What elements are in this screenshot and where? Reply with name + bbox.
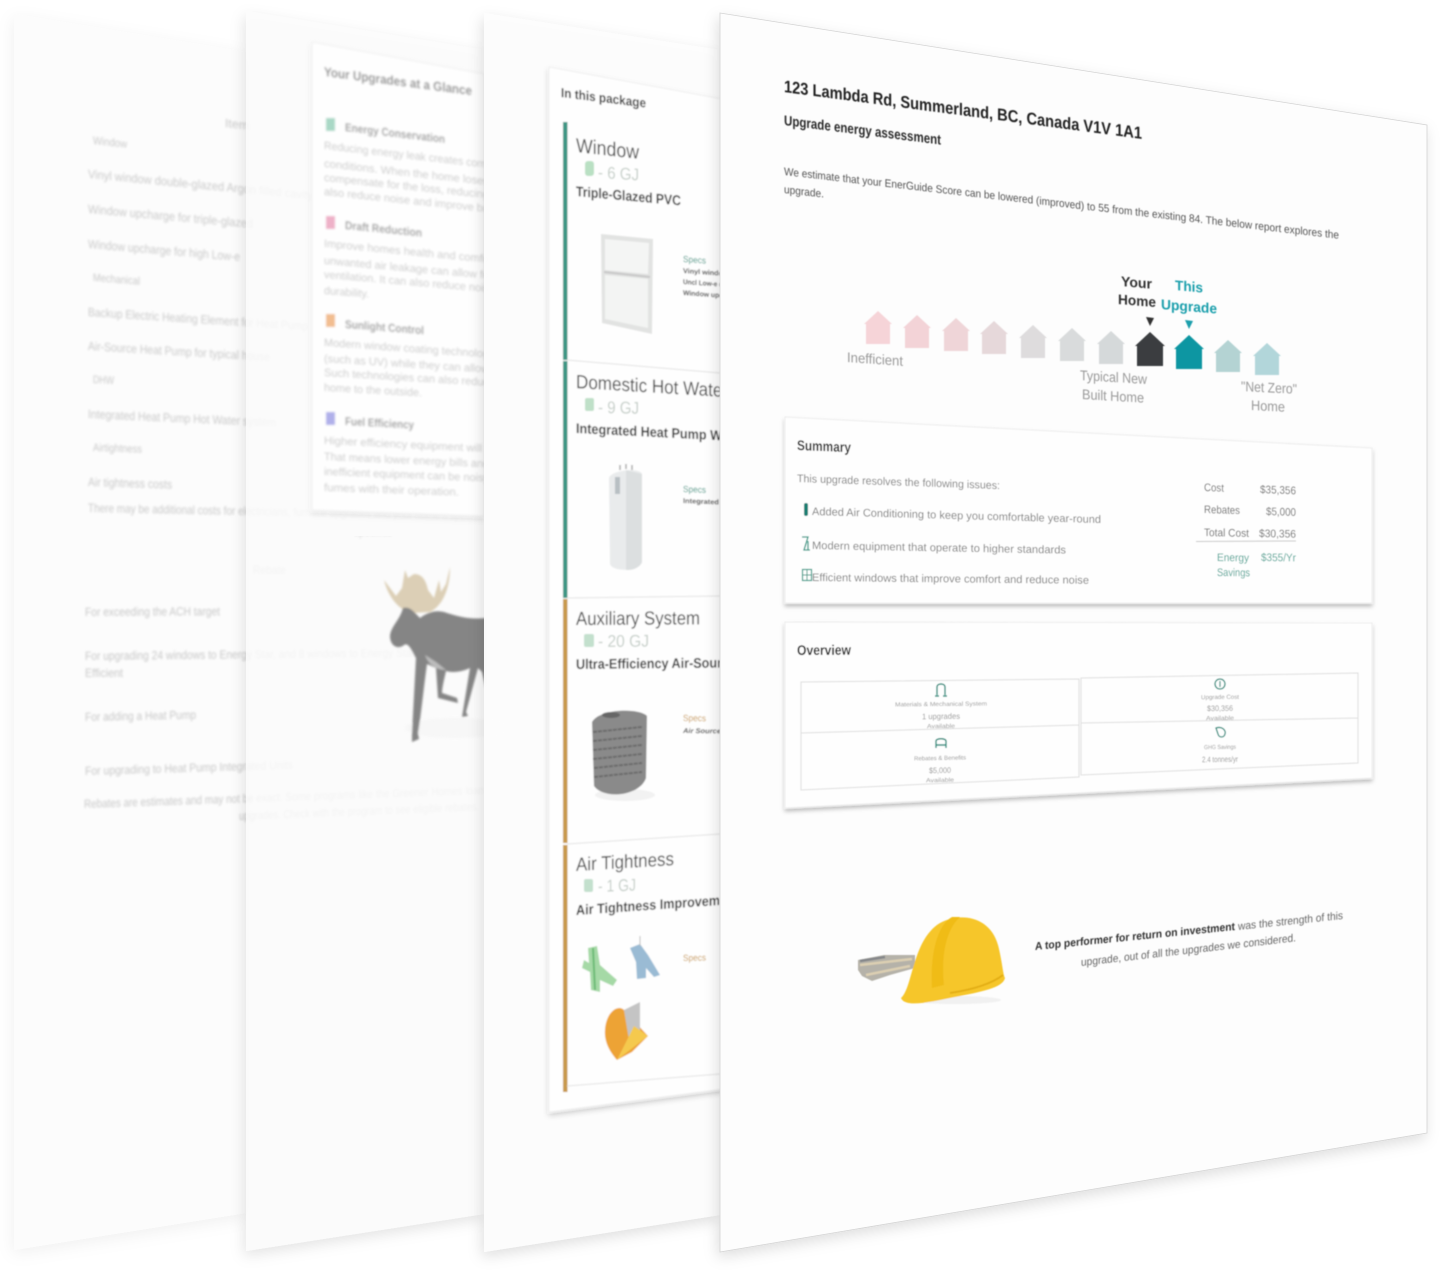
panel: page 2, in this package — [478, 18, 720, 1260]
cell: upgrade cost: Upgrade Cost — [1201, 695, 1239, 701]
item: energy conservation: also reduce noise and improve bu — [324, 186, 489, 215]
colour bars — [563, 122, 720, 1092]
specifics caption: specifics — [354, 525, 392, 539]
item: fuel efficiency: Fuel Efficiency — [345, 416, 415, 432]
cell: upgrade cost: Available — [1206, 716, 1235, 722]
icon: moose — [384, 567, 505, 742]
subtitle: Upgrade energy assessment — [784, 112, 941, 148]
intro text: We estimate that your EnerGuide Score can be lowered (improved) to 55 from the existing 84. The below report explores the — [784, 166, 1339, 242]
item: sunlight control: (such as UV) while they can allow — [324, 353, 489, 376]
cost table: Cost — [1204, 482, 1224, 495]
icon: window product — [601, 234, 653, 334]
cell: rebates and benefits — [914, 739, 966, 784]
cost table: $355/Yr — [1261, 552, 1296, 564]
item: draft reduction: Improve homes health and comfo — [324, 238, 489, 266]
marker: your home: Your — [1121, 273, 1153, 292]
item: auxiliary system: Auxiliary System — [576, 608, 700, 630]
item: sunlight control: Such technologies can also reduc — [324, 367, 489, 389]
icon: blue sealant tube — [630, 936, 660, 979]
cost table text: There may be additional costs for electricians, furnace upgrades and your home's specific — [88, 501, 483, 523]
cell: ghg savings: 2.4 tonnes/yr — [1202, 755, 1238, 764]
item: domestic hot water: Integrated l — [683, 498, 723, 507]
heading: Your Upgrades at a Glance — [324, 64, 472, 98]
item: air tightness: - 1 GJ — [598, 875, 636, 896]
item: draft reduction: ventilation. It can also reduce nois — [324, 269, 489, 295]
icon: keys — [858, 955, 915, 981]
marker: this upgrade: Upgrade — [1161, 296, 1217, 316]
rebate table text: upgrades. Check with the program to see eligible rebates. — [239, 799, 479, 823]
cell: materials and mechanical system: Materials & Mechanical System — [895, 702, 987, 708]
item: domestic hot water: Integrated Heat Pump W — [576, 420, 723, 443]
intro text: upgrade. — [784, 184, 824, 201]
rebate table text: For upgrading 24 windows to Energy Star, and 8 windows to Energy Star Most — [85, 645, 441, 663]
marker: your home — [1118, 273, 1156, 326]
cost table text: Backup Electric Heating Element for Heat Pump — [88, 305, 308, 333]
item: window: Vinyl windo — [683, 268, 723, 278]
rebate table text: For exceeding the ACH target — [85, 604, 221, 619]
item: air tightness: Air Tightness — [576, 849, 674, 876]
house scale icons — [864, 311, 1281, 375]
item: fuel efficiency — [324, 412, 489, 499]
rebate table text — [84, 563, 484, 823]
item: window: Window — [576, 135, 639, 164]
item: energy conservation: Energy Conservation — [345, 122, 445, 146]
item: energy conservation: Reducing energy leak creates comf — [324, 140, 490, 171]
marker: this upgrade — [1161, 277, 1217, 329]
rebate table text: For upgrading to Heat Pump Integrated Units — [85, 758, 293, 778]
issues list: Efficient windows that improve comfort and reduce noise — [812, 572, 1089, 587]
scale labels: "Net Zero" — [1241, 378, 1297, 397]
rebate table text: For adding a Heat Pump — [85, 708, 196, 724]
item: auxiliary system: Air Source — [682, 728, 721, 735]
item: fuel efficiency: fumes with their operation. — [324, 482, 459, 499]
item: domestic hot water: Domestic Hot Water — [576, 372, 729, 402]
callout: top performer: was the strength of this — [1237, 910, 1343, 933]
icon: green sealant tube — [582, 946, 617, 992]
scale labels: Home — [1251, 397, 1285, 415]
item: fuel efficiency: inefficient equipment can be noisy — [324, 466, 489, 485]
icon: heat pump unit — [592, 711, 655, 801]
scale labels — [847, 349, 1297, 415]
rebate table text: Efficient — [85, 666, 124, 680]
item: sunlight control: Sunlight Control — [345, 319, 424, 337]
cell: rebates and benefits: Available — [926, 778, 955, 784]
scale labels: Built Home — [1082, 386, 1144, 406]
cost table — [1196, 482, 1296, 579]
panel: page 1, upgrade energy assessment — [720, 13, 1427, 1252]
cell: materials and mechanical system: 1 upgrades — [922, 712, 960, 721]
cell: ghg savings — [1202, 727, 1238, 764]
callout: top performer: A top performer for return on investment — [1035, 921, 1235, 953]
cost table text: Item — [225, 116, 249, 133]
overview heading: Overview — [797, 642, 851, 658]
scale labels: Inefficient — [847, 349, 903, 369]
cell: upgrade cost — [1201, 679, 1239, 722]
item: air tightness — [576, 849, 720, 1060]
cell: rebates and benefits: Rebates & Benefits — [914, 755, 966, 763]
item: air tightness: Air Tightness Improvem — [576, 892, 720, 918]
item: domestic hot water: - 9 GJ — [598, 398, 639, 418]
cell: rebates and benefits: $5,000 — [929, 766, 951, 775]
item: draft reduction: Draft Reduction — [345, 220, 422, 240]
card: summary — [785, 417, 1372, 603]
item: sunlight control: Modern window coating technolog — [324, 337, 489, 361]
icon: insulation roll — [605, 1002, 648, 1060]
marker: this upgrade: This — [1175, 277, 1203, 296]
callout: top performer — [1035, 910, 1343, 969]
item: energy conservation — [324, 118, 490, 215]
item: energy conservation: compensate for the loss, reducing — [324, 172, 489, 201]
item: draft reduction: durability. — [324, 285, 369, 301]
cost table text: Mechanical — [93, 272, 140, 288]
cost table: $5,000 — [1266, 506, 1296, 519]
item: domestic hot water — [576, 372, 729, 570]
item: air tightness: Specs — [683, 953, 706, 963]
cost table: $30,356 — [1259, 528, 1296, 541]
cost table: Total Cost — [1204, 527, 1249, 540]
item: sunlight control — [324, 314, 489, 399]
item: sunlight control: home to the outside. — [324, 382, 422, 399]
item: auxiliary system — [576, 608, 722, 801]
card: your upgrades at a glance — [312, 42, 490, 516]
heading: In this package — [561, 85, 646, 111]
cost table text: DHW — [93, 374, 114, 387]
item: window: Uncl Low-e d — [683, 279, 723, 289]
callout: top performer: upgrade, out of all the upgrades we considered. — [1081, 932, 1296, 969]
item: fuel efficiency: That means lower energy bills and — [324, 451, 489, 470]
panel: page 3, upgrades at a glance — [246, 11, 505, 1251]
cost table text — [88, 116, 483, 523]
summary heading: Summary — [797, 437, 851, 455]
card: overview — [785, 622, 1372, 808]
item: draft reduction: unwanted air leakage can allow fo — [324, 255, 489, 282]
item: auxiliary system: Ultra-Efficiency Air-Sour — [576, 655, 722, 672]
cell: materials and mechanical system: Available — [927, 724, 956, 730]
cell: upgrade cost: $30,356 — [1207, 704, 1233, 713]
icon: water heater — [609, 464, 642, 570]
rebate table text: Rebates are estimates and may not be exact. Some programs like the Greener Homes loan — [84, 783, 484, 811]
item: window: Window upc — [683, 290, 723, 300]
cost table text: Window — [93, 135, 127, 151]
issues list: This upgrade resolves the following issues: — [797, 473, 1000, 492]
scale labels: Typical New — [1080, 367, 1148, 387]
cost table text: Window upcharge for triple-glazed — [88, 202, 253, 231]
issues list: Modern equipment that operate to higher standards — [812, 540, 1067, 557]
cell: materials and mechanical system — [895, 684, 987, 730]
item: window: Specs — [683, 254, 706, 266]
cost table text: Vinyl window double-glazed Argon filled cavity with Low-e — [88, 167, 369, 208]
icon: yellow hard hat — [901, 917, 1005, 1004]
marker: your home: Home — [1118, 291, 1156, 310]
item: energy conservation: conditions. When the home loses — [324, 158, 490, 188]
overview grid — [801, 673, 1358, 790]
rebate table text: Rebate — [253, 563, 286, 577]
item: auxiliary system: Specs — [683, 713, 706, 723]
cost table: Energy — [1217, 552, 1249, 564]
chart: house scale — [847, 273, 1297, 415]
cell: ghg savings: GHG Savings — [1204, 745, 1236, 751]
card: package list — [546, 70, 720, 1118]
item: window: - 6 GJ — [598, 163, 639, 184]
item: auxiliary system: - 20 GJ — [598, 631, 649, 651]
title: 123 Lambda Rd, Summerland, BC, Canada V1V 1A1 — [784, 77, 1142, 143]
cost table text: Air-Source Heat Pump for typical house — [88, 339, 270, 364]
cost table text: Airtightness — [93, 442, 142, 456]
item: domestic hot water: Specs — [683, 484, 706, 495]
panel: page 4, cost table — [14, 14, 484, 1250]
issues list — [797, 473, 1101, 587]
cost table text: Window upcharge for high Low-e — [88, 237, 240, 264]
cost table: Savings — [1217, 567, 1250, 579]
cost table: $35,356 — [1260, 484, 1296, 497]
cost table: Rebates — [1204, 504, 1240, 517]
item: fuel efficiency: Higher efficiency equipment will r — [324, 435, 489, 455]
issues list: Added Air Conditioning to keep you comfortable year-round — [812, 506, 1101, 526]
item: draft reduction — [324, 216, 489, 301]
item: window: Triple-Glazed PVC — [576, 183, 681, 208]
cost table text: Air tightness costs — [88, 475, 172, 492]
cost table text: Integrated Heat Pump Hot Water system — [88, 407, 276, 429]
item: window — [576, 135, 723, 334]
